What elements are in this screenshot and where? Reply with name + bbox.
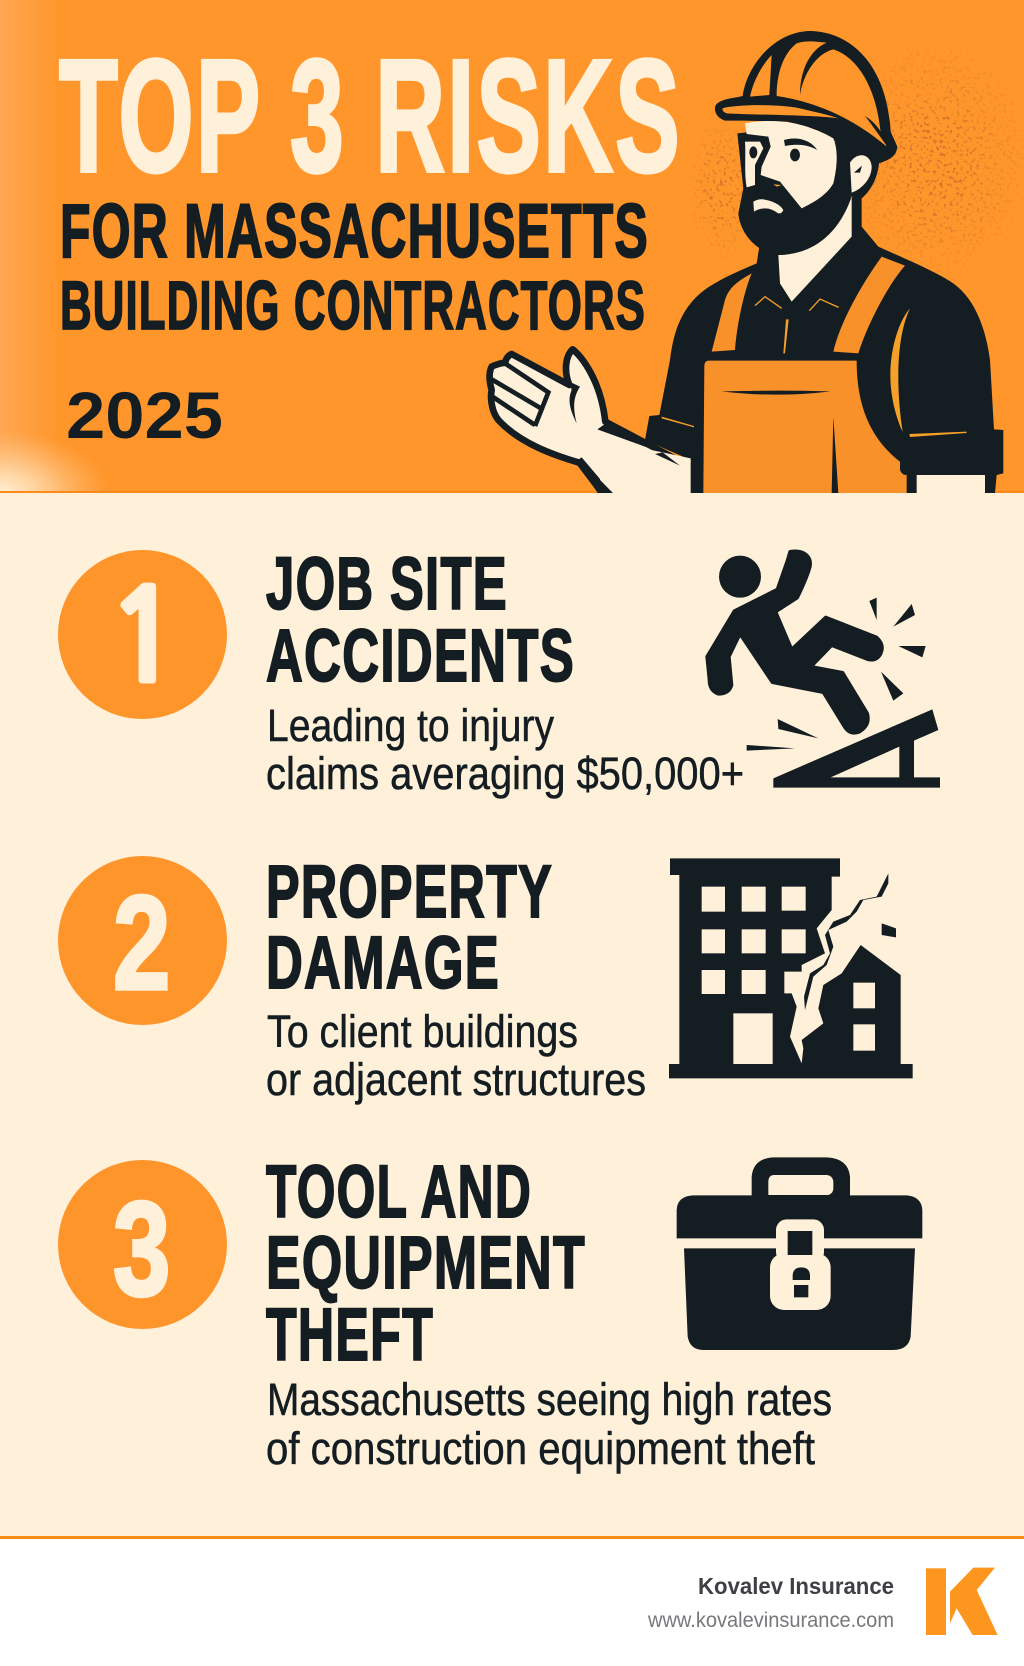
number badge 1: 1 xyxy=(106,574,183,700)
risk 2 xyxy=(58,850,913,1105)
risk 3 xyxy=(58,1150,922,1474)
risk 1 xyxy=(58,542,940,799)
company name: Kovalev Insurance xyxy=(698,1573,894,1599)
number badge 2: 2 xyxy=(113,869,173,1018)
forearm sliver xyxy=(600,433,691,493)
heading 2: PROPERTY xyxy=(266,850,553,933)
heading 1 xyxy=(266,542,575,697)
description 2 xyxy=(266,1006,646,1105)
heading 3: TOOL AND xyxy=(266,1150,532,1233)
description 3 xyxy=(266,1374,832,1474)
description 2: or adjacent structures xyxy=(266,1054,646,1105)
heading 1: JOB SITE xyxy=(266,542,508,625)
description 3: of construction equipment theft xyxy=(266,1423,815,1474)
neck xyxy=(778,197,852,302)
shirt details xyxy=(890,308,910,432)
face xyxy=(745,121,837,208)
heading 2: DAMAGE xyxy=(266,921,500,1004)
subtitle line 2: BUILDING CONTRACTORS xyxy=(60,267,646,344)
hard hat xyxy=(715,31,897,163)
subtitle line 1: FOR MASSACHUSETTS xyxy=(60,189,649,274)
logo: K xyxy=(926,1568,998,1635)
heading 2 xyxy=(266,850,553,1004)
description 1: Leading to injury xyxy=(267,700,554,751)
number badge 3: 3 xyxy=(113,1175,173,1324)
heading 3 xyxy=(266,1150,586,1376)
ear xyxy=(850,155,872,193)
icon: falling worker xyxy=(707,551,940,788)
heading 3: THEFT xyxy=(266,1293,434,1376)
description 1 xyxy=(266,700,744,799)
heading 1: ACCIDENTS xyxy=(266,614,575,697)
illustration: construction worker xyxy=(490,31,1003,497)
heading 3: EQUIPMENT xyxy=(266,1221,586,1304)
icon: locked toolbox xyxy=(677,1157,922,1350)
number badge 1 xyxy=(58,550,227,719)
panel: risks list xyxy=(0,493,1024,1536)
hand and forearm xyxy=(490,349,693,497)
footer divider xyxy=(0,1536,1024,1539)
number badge 3 xyxy=(58,1160,227,1329)
overall straps xyxy=(712,273,752,352)
panel: footer xyxy=(647,1568,998,1635)
description 2: To client buildings xyxy=(267,1006,578,1057)
icon: cracked building xyxy=(669,858,913,1078)
year: 2025 xyxy=(66,378,223,452)
number badge 2 xyxy=(58,856,227,1025)
beard and hair xyxy=(737,127,879,255)
panel: header xyxy=(0,0,1024,497)
bib apron xyxy=(703,361,907,493)
description 3: Massachusetts seeing high rates xyxy=(267,1374,832,1425)
description 1: claims averaging $50,000+ xyxy=(266,748,744,799)
website: www.kovalevinsurance.com xyxy=(647,1609,894,1632)
body xyxy=(645,197,1003,493)
